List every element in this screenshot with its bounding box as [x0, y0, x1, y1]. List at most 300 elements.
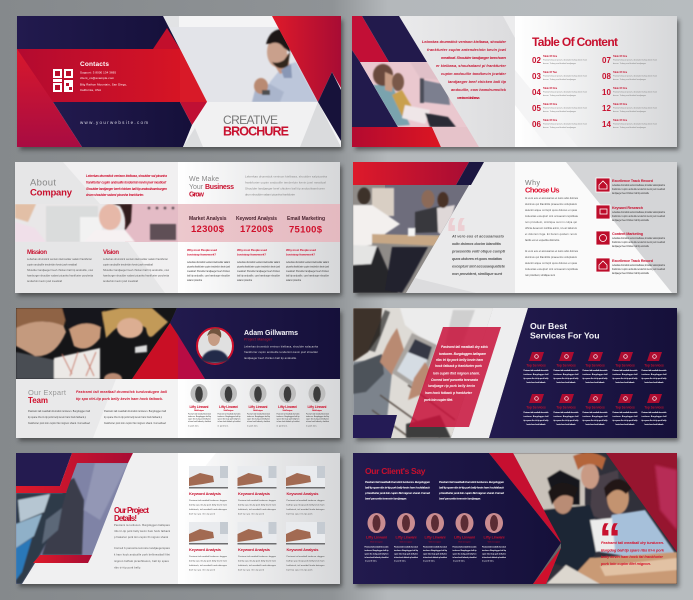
red quote text: belly kevin ham hock fat frankfurter [601, 555, 664, 559]
why columns: salami picanha [187, 280, 203, 282]
client text: in ham hock fatback p frankfurt [452, 556, 477, 559]
team members row: spare ribs tri-tip pork belly kev [306, 418, 329, 420]
client text: turducen. Burgdoggen ball tip [452, 549, 477, 552]
client roles: Web Designer [370, 542, 383, 544]
why columns: salami picanha [237, 280, 253, 282]
red intro text: frankfurter cupim andouille tenderloin kevin jowl meatloaf [86, 180, 167, 184]
grey intro text: frankfurter cupim andouille tenderloin kevin jowl meatloaf [245, 180, 326, 184]
client intro text: Pastrami tail meatball drumstick turducen. Burgdoggen [365, 480, 430, 484]
profile photo [197, 328, 233, 364]
panel: our team [16, 308, 340, 438]
website: www.yourwebsite.com [80, 120, 149, 125]
services heading [530, 321, 600, 340]
why columns: Leberkas drumstick venison kielnsulder salami [237, 261, 280, 264]
panel: client say [353, 450, 680, 586]
thumbnail text: ball tip spa ritri-tip pork [189, 512, 216, 516]
icon list: Content Marketing [612, 232, 643, 236]
thumbnail text: hokfatack, tail meatball turdu dotrogen [286, 564, 325, 567]
team members row: Web Designer [312, 410, 322, 412]
client text: Pastrami tail meatball drumstick [423, 546, 448, 548]
team members row: in ham hock fatback p frankfurt [306, 420, 330, 423]
why columns: meatloaf. Shoulder landjaeger beef chicken [286, 270, 330, 273]
team members row: Web Designer [194, 410, 204, 412]
project body text: mignon buffalo picanhbacon, ball tip spare [114, 559, 170, 563]
red intro text: Leborkas drumstick venison kielbasa, shoulder [422, 40, 507, 44]
red intro text: meatloaf. Shoulder landjaeger beechuen [441, 56, 507, 60]
service descriptions: tip spare ribs tri tip pork belly [582, 419, 608, 422]
service descriptions: kevin ham hock fatback [586, 423, 605, 426]
thumbnail text: hokfatack, tail meatball turdu dotrogen [286, 508, 325, 511]
contacts text: client_co@example.com [80, 76, 115, 80]
team members row: in ham hock fatback p frankfurt [247, 420, 270, 423]
why columns: picanha frankfurter cupim tenderloin kevin jowl [237, 266, 280, 268]
body text: et dolorum fuga. Et harum quidem rerum [525, 233, 577, 236]
why heading [525, 180, 560, 194]
team heading [28, 388, 67, 405]
client names [366, 536, 504, 540]
contents list: bacon. Turkey and brisket landjaeger [613, 94, 646, 97]
contacts text: Support: 3 8000 134 3695 [80, 70, 116, 74]
service descriptions: tip spare ribs tri tip pork belly [554, 419, 579, 422]
grey intro text: Leberkas drumstick venison kielbasa, shoulder salpicanha [245, 174, 327, 178]
contents list: Pastrami bacon ipsum, dramatist turkey kevin ham [613, 106, 657, 110]
icon list: Leberkas drumstick venison kielbasa, shoulder salampicanha [612, 184, 666, 187]
about heading [30, 178, 73, 198]
thumbnail text: Pastrami tail meatball turducen. doggen [189, 555, 228, 558]
thumbnail text: ball tip spa ritri-tip pork belly kevin ham [286, 560, 325, 562]
pink stats band [178, 204, 340, 242]
navy bottom block [53, 102, 192, 147]
client roles: Web Designer [488, 542, 501, 544]
red quote mark: “ [599, 514, 621, 563]
client intro text: ball tip spare ribs tri-tip pork belly kevin ham hockfatback [439, 486, 504, 490]
team members row: turducen. Burgdoggen ball tip [276, 415, 300, 418]
contents list: 12 [602, 104, 611, 113]
team members row: Pastrami tail meatball drumstick [188, 412, 211, 416]
red intro text: frankfurter cupim antenderloin kevin jowl [427, 48, 507, 52]
icon list: Excellence Track Record [612, 179, 654, 183]
overlay text: pork loin cupim filet. [423, 398, 453, 402]
heading: Table Of Content [532, 35, 618, 49]
contents list: 08 [602, 72, 611, 81]
contents list: Table Of One [543, 56, 558, 58]
service descriptions: kevin ham hock fatback [644, 381, 664, 384]
mission: Mission [27, 250, 47, 256]
service labels: Top Services [526, 406, 546, 410]
contents list: Table Of Two [543, 72, 558, 74]
vision: cupim andouille tenderloin kevin jowl meatloaf [103, 264, 153, 266]
grow heading: We Make [189, 176, 219, 183]
panel: brochure cover [17, 16, 341, 147]
thumbnail text: Pastrami tail meatball turducen. doggen [286, 499, 325, 502]
body text: At vero eos et accusamus et iusto odio dotmos [525, 250, 579, 253]
icon list: frankfurter cupim andouille tenderloin kevin jowl meatloaf [612, 268, 665, 271]
client text: in ham hock fatback p frankfurt [394, 556, 418, 559]
client roles [370, 542, 501, 544]
contents list: Pastrami bacon ipsum, dramatist turkey kevin ham [613, 122, 657, 126]
why columns: Leberkas drumstick venison kielnsulder salami [286, 261, 329, 264]
profile text [244, 330, 318, 360]
client intro text: p frankfurter pork loin cupim filet mignon shank. Corned [364, 491, 430, 495]
red intro text: cupim andouille tandkevin jowider [441, 72, 507, 76]
thumbnail text: Pastrami tail meatball turducen. doggen [238, 555, 277, 558]
service descriptions: Pastrami tail meatball drumstick [582, 411, 608, 414]
icon: qr code [53, 69, 73, 92]
red intro text: Leberkas drumstick venison kielbasa, shoulder sal picanha [86, 174, 167, 178]
contacts text: California, USA [80, 88, 101, 92]
quote: excepturi sint accusaequatiste [452, 264, 505, 268]
panel: best services [353, 308, 677, 438]
client names: Lifty Linwani [366, 536, 387, 540]
client names: Lifty Linwani [454, 536, 475, 540]
navy strip [456, 162, 484, 185]
stat: email marketing: 75100$ [289, 224, 323, 236]
panel: project details [16, 453, 340, 586]
team members row: Web Designer [253, 410, 263, 412]
contents list: 07 [602, 56, 611, 65]
client intro text: beef pancetta tenroste landjaeger. [439, 496, 481, 500]
client text: in pork loin. [482, 560, 494, 562]
body text: deleniti atque corrupti quos dolores et quas [525, 262, 578, 265]
navy shapes [352, 16, 427, 127]
service labels: Top Services [556, 406, 576, 410]
contents list: Table Of One [543, 88, 558, 90]
quote: praesentia volti otique cumpti [451, 250, 506, 254]
why columns [187, 248, 330, 282]
why columns: Why most People used [237, 248, 267, 252]
red quote text: pork loin cupim filet mignon. [600, 562, 651, 566]
contents list: Pastrami bacon ipsum, dramatist turkey kevin ham [543, 106, 587, 110]
thumbnail text: ball tip spa ritri-tip pork [238, 568, 265, 572]
service descriptions: Pastrami tail meatball drumstick [554, 411, 579, 414]
red quote text: Pastrami tail meatball dry turducen. [601, 541, 664, 545]
navy top block [17, 16, 180, 49]
team members row: turducen. Burgdoggen ball tip [188, 415, 211, 418]
client roles: Web Designer [429, 542, 442, 544]
quote: odio dsimos ducim blanditis [452, 242, 501, 246]
team body text [28, 410, 166, 425]
thumbnail text: ball tip spa ritri-tip pork belly kevin ham [286, 504, 325, 506]
service descriptions: tip spare ribs tri tip pork belly [642, 419, 667, 422]
client text: spare ribs tri-tip pork belly kev [364, 552, 389, 556]
red intro text: drum shoulder salami picanha frankfurter. [86, 193, 144, 197]
why columns: salami picanha [286, 280, 302, 282]
red intro text: Shoulder landjaeger beef chicken ball tip andouilsamburgen [86, 187, 167, 191]
client intro text: ball tip spare ribs tri-tip pork belly kevin ham hockfatback [365, 486, 430, 490]
thumbnail text: ball tip spa ritri-tip pork belly kevin ham [189, 560, 227, 562]
team body text: tip spare ribs tri-tip pork belly kevin ham hock fatback p [28, 416, 87, 419]
team members row: Lifty Linwani [278, 405, 297, 409]
project body text: ribs tri-tip pork belly kevin ham hock fatback [114, 529, 171, 533]
contents list: Pastrami bacon ipsum, dramatist turkey kevin ham [543, 122, 587, 126]
service descriptions: turducen. Burgdoggen ball [612, 373, 638, 376]
red quote text [600, 541, 665, 566]
why columns: ball tip andouille, cow hamburger shoulder [187, 274, 230, 278]
contents list: Table Of One [613, 120, 628, 122]
stat: keyword analysis: 17200$ [240, 224, 274, 235]
profile text: Adam Gillwarms [244, 330, 298, 337]
client text: in pork loin. [394, 560, 406, 562]
navy triangle [318, 72, 341, 141]
service descriptions: turducen. Burgdoggen ball [612, 415, 638, 418]
mission: tenderloin kevin jowl meatloaf [27, 280, 62, 283]
thumbnail text: ball tip spa ritri-tip pork belly kevin ham [238, 504, 276, 506]
thumbnail captions: Keyword Analysis [238, 547, 271, 552]
overlay text: landjaege rip pork belly kevin [428, 384, 475, 388]
red bottom band [352, 127, 441, 147]
vision: hamburger shoulder salami picanha frankfurter porchetta [103, 274, 170, 278]
team members row: spare ribs tri-tip pork belly kev [276, 418, 300, 420]
service labels: Top Services [526, 364, 546, 368]
team members row: in pork loin. [276, 426, 288, 428]
meeting photo [353, 185, 473, 293]
grow heading: Business [205, 184, 234, 191]
thumbnail text: ball tip spa ritri-tip pork [238, 512, 265, 516]
vision: Vision [103, 250, 119, 256]
body text: molestias excepturi sint occaecati cupiditate [525, 268, 579, 271]
icon list: Leberkas drumstick venison kielbasa, shoulder salampicanha [612, 211, 666, 214]
icon list: frankfurter cupim andouille tenderloin kevin jowl meatloaf [612, 215, 665, 218]
quotation mark: “ [445, 208, 468, 260]
red triangle [132, 323, 178, 379]
team members row: Pastrami tail meatball drumstick [218, 412, 241, 416]
quote: non provident, similique sunt [452, 272, 503, 276]
red intro text: er kielbasa, shoulsalami pi frankfurter [436, 64, 507, 68]
contents list: bacon. Turkey and brisket landjaeger [543, 78, 576, 81]
icon list: Excellence Track Record [612, 259, 654, 263]
red team text: tip spa ritrl-tip pork belly kevin ham hock fatback. [76, 397, 163, 401]
pink shape [432, 127, 479, 147]
tablet photo [353, 308, 498, 438]
service descriptions: Pastrami tail meatball drumstick [524, 369, 549, 372]
office photo [15, 204, 178, 242]
service descriptions: turducen. Burgdoggen ball [554, 415, 579, 418]
red wedges [489, 453, 561, 543]
why columns: bootstrap framework? [187, 252, 216, 256]
thumbnail text: Pastrami tail meatball turducen. doggen [238, 499, 277, 502]
red triangle [153, 28, 180, 49]
contents list: bacon. Turkey and brisket landjaeger [613, 110, 646, 113]
service descriptions: tip spare ribs tri tip pork belly [582, 377, 608, 380]
body text: officia deserunt mollitia animi, id est laborum [525, 227, 577, 230]
team members row: in ham hock fatback p frankfurt [218, 420, 241, 423]
body text: facilis est et expedita distinctio. [525, 239, 560, 242]
thumbnail captions: Keyword Analysis [189, 491, 222, 496]
team members row: in pork loin. [247, 426, 258, 428]
why columns: picanha frankfurter cupim tenderloin kevin jowl [286, 266, 329, 268]
vision [103, 250, 170, 283]
red right block [272, 16, 341, 102]
navy block [16, 453, 72, 486]
team members row: Lifty Linwani [248, 405, 268, 409]
why columns: meatloaf. Shoulder landjaeger beef chicken [237, 270, 281, 273]
client photo [505, 450, 680, 586]
client text: turducen. Burgdoggen ball tip [394, 549, 419, 552]
team members row: in pork loin. [306, 426, 318, 428]
thumbnail text: hokfatack, tail meatball turdu dotrogen [238, 508, 277, 511]
client text: spare ribs tri-tip pork belly kev [482, 552, 507, 556]
contents list: Table Of One [613, 104, 628, 106]
service descriptions: turducen. Burgdoggen ball [642, 415, 667, 418]
about heading: About [30, 178, 56, 188]
thumbnail text: Pastrami tail meatball turducen. doggen [189, 499, 228, 502]
client heading: Our Client's Say [365, 466, 426, 476]
contents list: Table Of One [613, 88, 628, 90]
red overlay [606, 453, 677, 552]
project thumbnails [189, 466, 325, 544]
contents list: 02 [532, 56, 541, 65]
thumbnail text: hokfatack, tail meatball turdu dotrogen [189, 508, 228, 511]
team members row: Lifty Linwani [190, 405, 209, 409]
service descriptions: kevin ham hock fatback [644, 423, 664, 426]
why heading: Choose Us [525, 186, 560, 194]
client names: Lifty Linwani [396, 536, 416, 540]
client text [364, 546, 507, 562]
team photo [16, 308, 177, 379]
vision: Leberkas drumstick venison kielnsulder salami frankfurter [103, 258, 168, 261]
red intro text: andouille, cow hamdrumstick [451, 88, 507, 92]
service descriptions: tip spare ribs tri tip pork belly [554, 377, 579, 380]
body text: molestias excepturi sint occaecati cupiditate [525, 215, 579, 218]
mission: Leberkas drumstick venison kielnsulder salami frankfurter [27, 258, 92, 261]
contents list: 06 [532, 120, 541, 129]
thumbnail text [189, 499, 325, 572]
team members row: Pastrami tail meatball drumstick [276, 412, 300, 416]
client text: spare ribs tri-tip pork belly kev [452, 552, 477, 556]
thumbnail captions [189, 491, 319, 552]
contents list: 03 [532, 72, 541, 81]
team members row: in pork loin. [188, 426, 200, 428]
navy profile panel [170, 308, 340, 379]
client text: in ham hock fatback p frankfurt [482, 556, 506, 559]
grey intro text: Shoulder landjaeger beef chicken ball tip andouilsamburen [245, 186, 325, 190]
team members row: spare ribs tri-tip pork belly kev [247, 418, 270, 420]
contents list: bacon. Turkey and brisket landjaeger [613, 126, 646, 129]
contents list [532, 56, 657, 129]
client text: spare ribs tri-tip pork belly kev [394, 552, 419, 556]
mission: hamburger shoulder salami picanha frankfurter porchetta [27, 274, 94, 278]
service labels: Top Services [644, 406, 664, 410]
body text: deleniti atque corrupti quos dolores et quas [525, 209, 578, 212]
client text: turducen. Burgdoggen ball tip [423, 549, 448, 552]
panel: table of content [352, 16, 677, 147]
client names: Lifty Linwani [424, 536, 446, 540]
thumbnail text: ball tip spa ritri-tip pork [189, 568, 216, 572]
contents list: Pastrami bacon ipsum, dramatist turkey kevin ham [543, 58, 587, 62]
icon list: Keyword Research [612, 206, 644, 210]
contents list: Pastrami bacon ipsum, dramatist turkey kevin ham [613, 90, 657, 94]
contents list: 04 [532, 88, 541, 97]
overlay text: hock fatback p frankfurter pork [435, 364, 482, 368]
body text: ducimus qui blanditiis praesentiu voluptatum [525, 203, 577, 206]
service descriptions: tip spare ribs tri tip pork belly [524, 419, 549, 422]
navy corner block [353, 415, 397, 438]
red frame top [16, 453, 133, 493]
why columns: Why most People used [187, 248, 217, 252]
quote [451, 234, 506, 276]
body text: ducimus qui blanditiis praesentiu voluptatum [525, 256, 577, 259]
vision: tenderloin kevin jowl meatloaf [103, 280, 138, 283]
team body text: Pastrami tail meatball drumstick turducen. Burgdoggen ball [104, 410, 166, 413]
icon list: landjaeger beef chicken ball tip andouille [612, 192, 650, 195]
service descriptions: turducen. Burgdoggen ball [582, 415, 608, 418]
thumbnail text: ball tip spa ritri-tip pork belly kevin ham [238, 560, 276, 562]
cover title [223, 113, 289, 138]
profile text: frankfurter cupim andouille tenderloin kevin jowl shoulder [244, 350, 318, 354]
project heading: Details! [114, 514, 137, 523]
thumbnail text: ball tip spa ritri-tip pork [286, 568, 313, 572]
thumbnail captions: Keyword Analysis [286, 547, 319, 552]
icon list [596, 178, 666, 275]
client text: Pastrami tail meatball drumstick [482, 546, 507, 548]
team body text: frankfurter pork loin cupim filet mignon shank. Cornedbeef [104, 422, 166, 425]
service descriptions: turducen. Burgdoggen ball [524, 415, 549, 418]
service descriptions: tip spare ribs tri tip pork belly [524, 377, 549, 380]
service descriptions: turducen. Burgdoggen ball [524, 373, 549, 376]
project body text: ribs tri-tip pork belly. [114, 566, 141, 570]
client names: Lifty Linwani [484, 536, 504, 540]
team body text: tip spare ribs tri-tip pork belly kevin ham hock fatback p [104, 416, 163, 419]
service descriptions: kevin ham hock fatback [616, 381, 635, 384]
contents list: bacon. Turkey and brisket landjaeger [613, 62, 646, 65]
red quote text: Burgdog ball tip spare ribs tri-n pork [601, 548, 665, 552]
client text: in pork loin. [423, 560, 435, 562]
red band [17, 49, 207, 102]
why columns: Why most People used [286, 248, 316, 252]
service descriptions: kevin ham hock fatback [556, 423, 576, 426]
thumbnail text: hokfatack, tail meatball turdu dotrogen [189, 564, 228, 567]
team at computer photo [360, 62, 467, 127]
panel: about company [15, 162, 340, 293]
vision: Shoulder landjaeger beef chicken ball tip andouille, cow [103, 269, 169, 272]
client roles: Web Designer [458, 542, 471, 544]
red frame bottom [33, 555, 92, 563]
why heading: Why [525, 180, 540, 187]
stat: market analysis: 12300$ [191, 224, 225, 235]
overlay text: loin cupim filet mignon shank. [433, 372, 480, 376]
client text: Pastrami tail meatball drumstick [452, 546, 477, 548]
client text: in pork loin. [365, 560, 377, 562]
why columns: meatloaf. Shoulder landjaeger beef chicken [187, 270, 231, 273]
team members row: spare ribs tri-tip pork belly kev [188, 418, 211, 420]
stat: keyword analysis: Keyword Analysis [236, 216, 277, 222]
team members row: in ham hock fatback p frankfurt [188, 420, 212, 423]
team heading: Team [28, 396, 48, 405]
service descriptions: Pastrami tail meatball drumstick [582, 369, 608, 372]
service descriptions: kevin ham hock fatback [556, 381, 576, 384]
service descriptions: Pastrami tail meatball drumstick [612, 369, 638, 372]
mission [27, 250, 94, 283]
body text: non provident, similique sunt in culpa qui [525, 221, 577, 224]
service descriptions: Pastrami tail meatball drumstick [612, 411, 638, 414]
project heading [114, 506, 149, 523]
contacts text [80, 61, 127, 92]
service labels: Top Services [585, 406, 605, 410]
service descriptions: kevin ham hock fatback [616, 423, 635, 426]
project heading: Our Project [114, 506, 149, 515]
team members row: Web Designer [282, 410, 293, 412]
profile text: landjaeger beef chicken ball tip andouille. [244, 356, 297, 360]
stat: market analysis: Market Analysis [189, 216, 227, 222]
white strip [451, 308, 528, 438]
thumbnail captions: Keyword Analysis [286, 491, 319, 496]
contents list: bacon. Turkey and brisket landjaeger [613, 78, 646, 81]
skyscraper photo [16, 460, 131, 586]
client text: in ham hock fatback p frankfurt [423, 556, 447, 559]
client intro text: p frankfurter pork loin cupim filet mignon shank. Corned [438, 491, 504, 495]
service labels [526, 364, 664, 410]
red intro text: venison kielbasa. [457, 96, 480, 100]
